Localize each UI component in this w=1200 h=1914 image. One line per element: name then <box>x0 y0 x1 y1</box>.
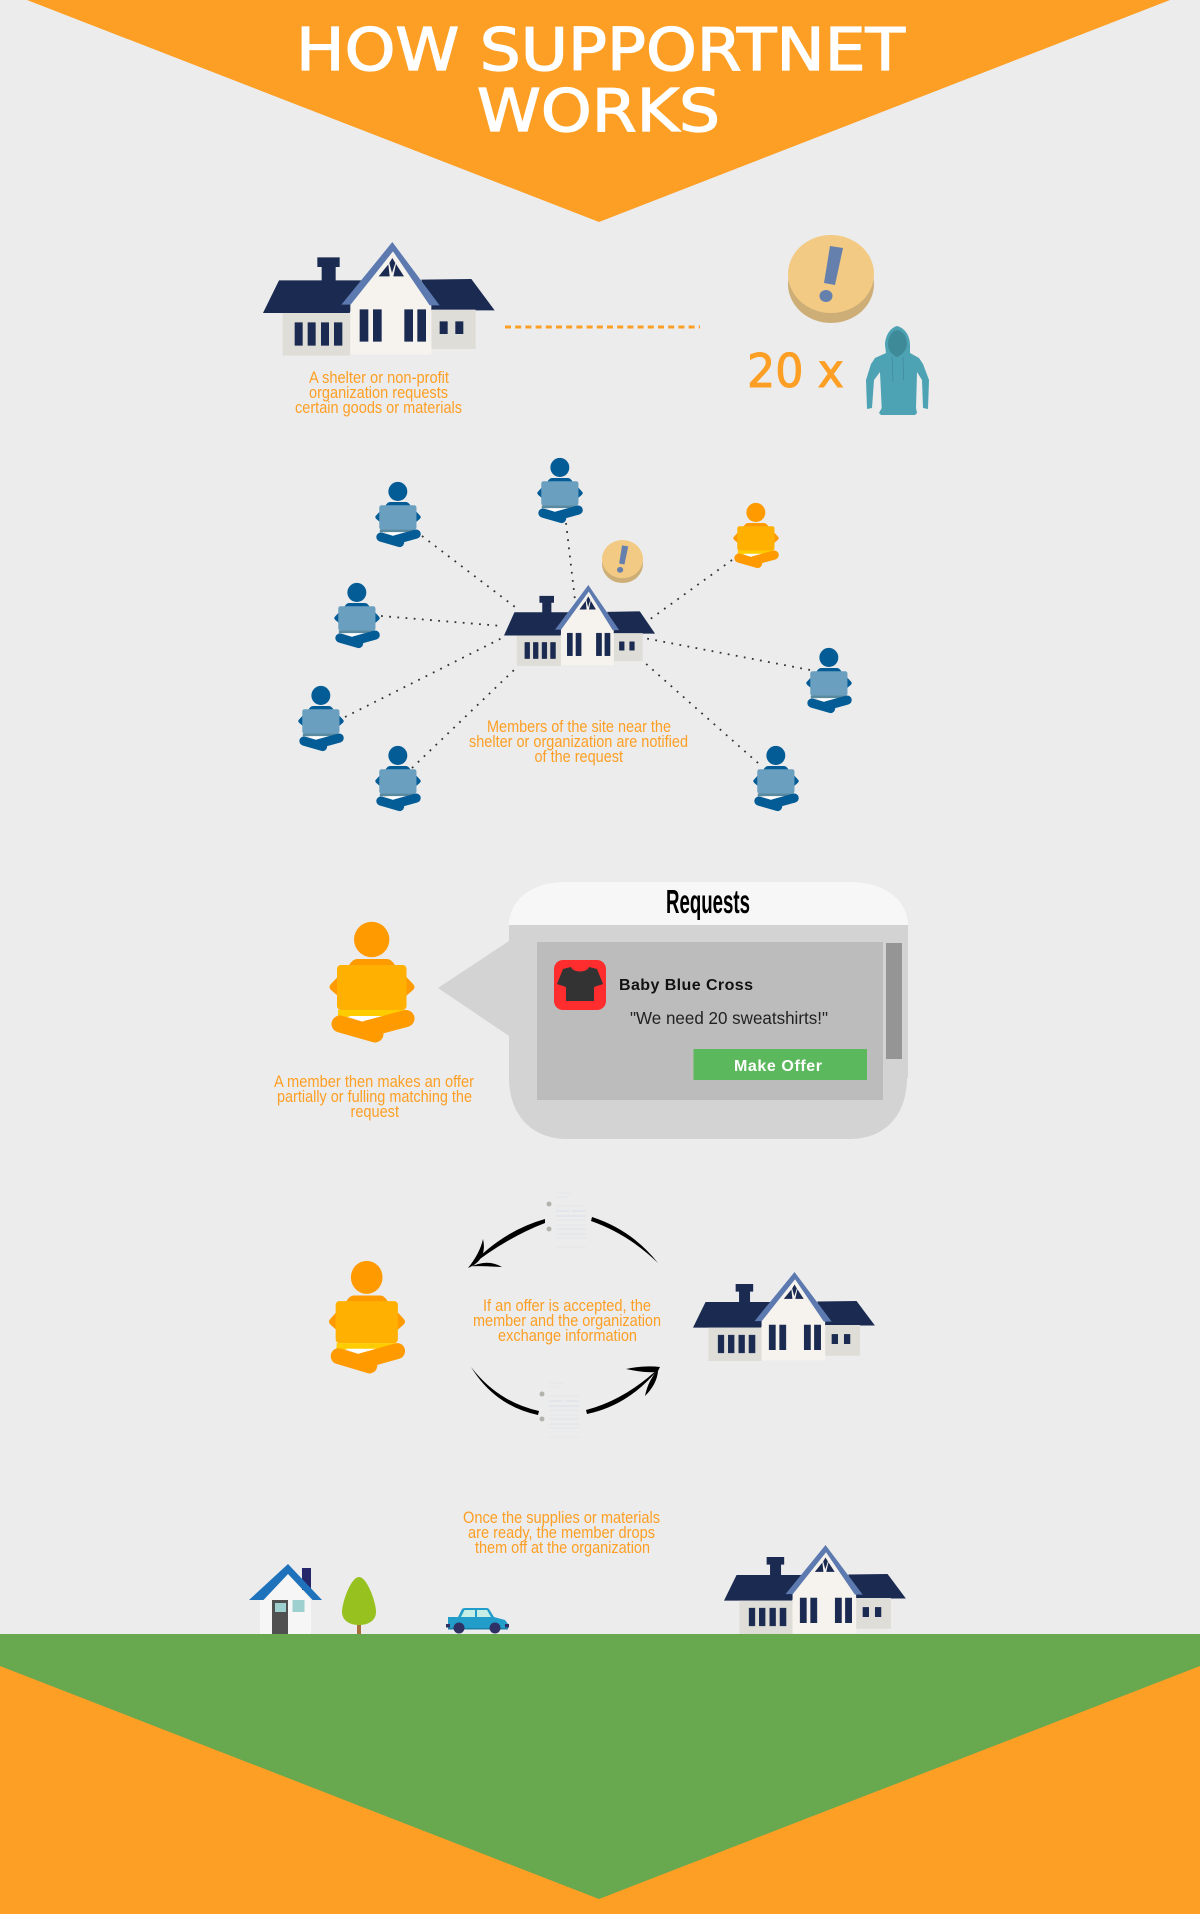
request list panel <box>537 942 883 1100</box>
icon: member house <box>249 1564 322 1634</box>
caption: step 3: partially or fulling matching the <box>277 1088 472 1106</box>
bubble header <box>509 882 908 925</box>
icon: car <box>446 1608 509 1634</box>
caption: step 4 <box>473 1297 661 1345</box>
icon: red shirt badge <box>554 960 606 1010</box>
button: Make Offer: Make Offer <box>734 1058 822 1075</box>
icon: highlighted member <box>733 503 779 563</box>
icon: member top left <box>375 482 421 542</box>
caption: step 1: certain goods or materials <box>295 399 462 417</box>
icon: drop-off shelter <box>724 1545 906 1634</box>
icon: small alert coin <box>602 540 643 583</box>
icon: member making offer <box>330 922 414 1034</box>
panel: requests speech bubble <box>438 882 908 1139</box>
icon: alert coin <box>788 235 874 323</box>
arrow: member to organization <box>471 1366 660 1415</box>
button: Make Offer <box>694 1049 867 1080</box>
icon: member exchanging info <box>329 1261 405 1365</box>
text: 20 x: 20 x <box>747 344 844 398</box>
caption: step 5: Once the supplies or materials <box>463 1509 660 1527</box>
icon: member lower left <box>298 686 344 746</box>
caption: step 4: member and the organization <box>473 1312 661 1330</box>
icon: member left <box>334 583 380 643</box>
organization name: Baby Blue Cross <box>619 977 753 994</box>
icon: document bottom <box>540 1383 579 1437</box>
bubble body <box>509 925 908 1139</box>
ground <box>0 1634 1200 1914</box>
caption: step 1 <box>295 369 462 417</box>
icon: central shelter <box>504 585 655 666</box>
caption: step 1: organization requests <box>309 384 448 402</box>
icon: hoodie <box>866 326 929 415</box>
request quote: "We need 20 sweatshirts!" <box>630 1008 828 1028</box>
icon: document top <box>546 1193 586 1247</box>
caption: step 2: Members of the site near the <box>487 718 671 736</box>
icon: tree <box>342 1577 376 1634</box>
caption: step 2: shelter or organization are notified <box>469 733 688 751</box>
bubble pointer <box>438 941 509 1036</box>
caption: step 3 <box>274 1073 474 1121</box>
caption: step 1: A shelter or non-profit <box>309 369 449 387</box>
dashed connector <box>505 326 700 328</box>
caption: step 5: are ready, the member drops <box>468 1524 655 1542</box>
icon: member bottom left <box>375 746 421 806</box>
title: WORKS <box>477 76 720 145</box>
header banner <box>27 0 1170 222</box>
title: HOW SUPPORTNET <box>296 15 906 84</box>
footer banner <box>0 1666 1200 1914</box>
icon: shelter requesting goods <box>263 242 495 356</box>
icon: shelter exchanging info <box>693 1272 875 1361</box>
caption: step 5 <box>463 1509 660 1557</box>
caption: step 4: If an offer is accepted, the <box>483 1297 651 1315</box>
member network <box>298 458 852 806</box>
caption: step 3: A member then makes an offer <box>274 1073 474 1091</box>
icon: member top <box>537 458 583 518</box>
icon: member right <box>806 648 852 708</box>
icon: member bottom right <box>753 746 799 806</box>
caption: step 5: them off at the organization <box>475 1539 650 1557</box>
heading: Requests: Requests <box>666 883 750 920</box>
caption: step 2 <box>469 718 688 766</box>
caption: step 3: request <box>350 1103 399 1121</box>
network connection lines <box>345 523 810 768</box>
title <box>296 15 906 145</box>
caption: step 2: of the request <box>534 748 623 766</box>
scrollbar <box>886 943 902 1059</box>
caption: step 4: exchange information <box>498 1327 637 1345</box>
arrow: organization to member <box>468 1217 658 1268</box>
